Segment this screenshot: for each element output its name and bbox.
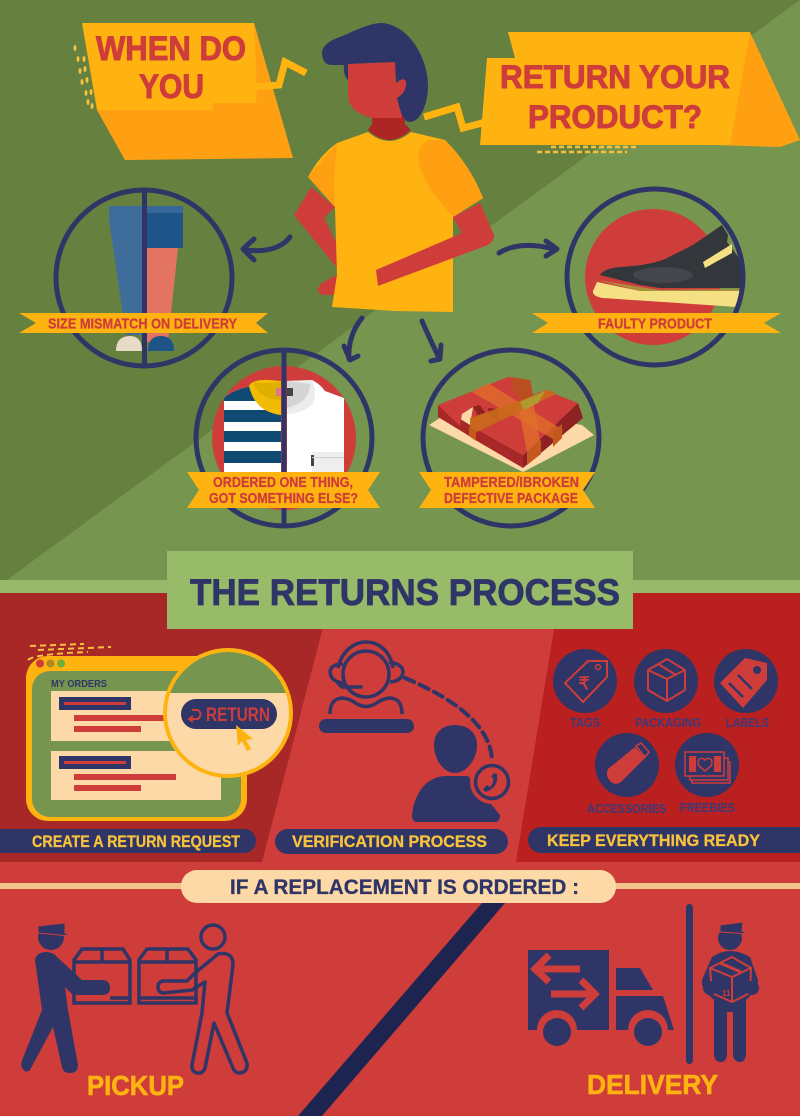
divider bar [686, 904, 693, 1064]
icon: customer outline [158, 925, 247, 1073]
icon: courier holding box [702, 922, 759, 1062]
pill: keep everything ready [528, 827, 800, 853]
panel: keep everything ready icons: PACKAGING [635, 715, 701, 730]
pill: keep everything ready: KEEP EVERYTHING READY [547, 831, 761, 850]
panel: speech bubble when do you [74, 23, 306, 160]
arrow: to damaged package [422, 321, 441, 361]
icon: tags [553, 649, 617, 713]
panel: delivery illustration [528, 904, 759, 1100]
panel: keep everything ready icons: TAGS [570, 715, 600, 730]
icon: packaging [634, 649, 698, 713]
panel: create a return request browser [26, 644, 296, 821]
divider: diagonal navy stripe [298, 903, 505, 1116]
panel: damaged package circle: TAMPERED/IBROKEN [444, 475, 579, 491]
pill: create a return request [0, 829, 256, 853]
arrow: to size mismatch [243, 237, 290, 260]
icon: accessories usb drive [595, 733, 659, 797]
panel: wrong item circle: GOT SOMETHING ELSE? [209, 491, 358, 507]
icon: package left [74, 949, 130, 1003]
panel: keep everything ready icons: ACCESSORIES [587, 801, 666, 816]
arrow: to faulty product [499, 241, 557, 256]
icon: labels [714, 649, 778, 713]
panel: keep everything ready icons: FREEBIES [680, 800, 735, 815]
icon: freebies cash [675, 733, 739, 797]
panel: speech bubble when do you: WHEN DO [96, 30, 246, 68]
icon: magnifier with return button: RETURN [206, 705, 270, 726]
icon: delivery truck [528, 950, 674, 1046]
icon: courier holding box: 11 [722, 989, 731, 998]
panel: size mismatch circle: SIZE MISMATCH ON DELIVERY [48, 316, 237, 332]
pill: create a return request: CREATE A RETURN REQUEST [32, 832, 241, 851]
background: green top section [0, 0, 800, 590]
pill: verification process [275, 829, 508, 854]
label: delivery: DELIVERY [587, 1069, 718, 1100]
pill: verification process: VERIFICATION PROCESS [292, 832, 487, 851]
icon: tags: ₹ [579, 674, 590, 693]
arrow: to wrong item [344, 318, 362, 360]
panel: faulty product circle [532, 189, 781, 365]
panel: size mismatch circle [19, 190, 268, 366]
panel: keep everything ready icons: LABELS [726, 715, 769, 730]
panel: damaged package circle [419, 350, 599, 526]
background: process section panels [0, 580, 800, 1116]
panel: keep everything ready icons [553, 649, 778, 816]
panel: pickup illustration [21, 923, 247, 1101]
icon: magnifier with return button [160, 645, 296, 776]
panel: wrong item circle: ORDERED ONE THING, [213, 475, 353, 491]
heading: the returns process: THE RETURNS PROCESS [190, 572, 620, 613]
panel: verification process agent and customer [319, 642, 514, 822]
heading: the returns process [167, 551, 633, 629]
panel: create a return request browser: MY ORDERS [51, 678, 107, 690]
heading: if a replacement is ordered: IF A REPLACEMENT IS ORDERED : [230, 876, 579, 899]
panel: speech bubble return your product: PRODUCT? [528, 99, 702, 135]
heading: if a replacement is ordered [181, 870, 616, 903]
icon: package right [139, 949, 196, 1003]
panel: damaged package circle: DEFECTIVE PACKAGE [444, 491, 578, 507]
person illustration [294, 23, 494, 312]
panel: faulty product circle: FAULTY PRODUCT [598, 316, 712, 332]
label: pickup: PICKUP [87, 1070, 184, 1101]
panel: speech bubble return your product [424, 32, 800, 152]
panel: wrong item circle [187, 350, 380, 526]
icon: courier with box [21, 923, 110, 1073]
panel: speech bubble return your product: RETURN YOUR [500, 59, 730, 95]
panel: speech bubble when do you: YOU [139, 68, 204, 106]
